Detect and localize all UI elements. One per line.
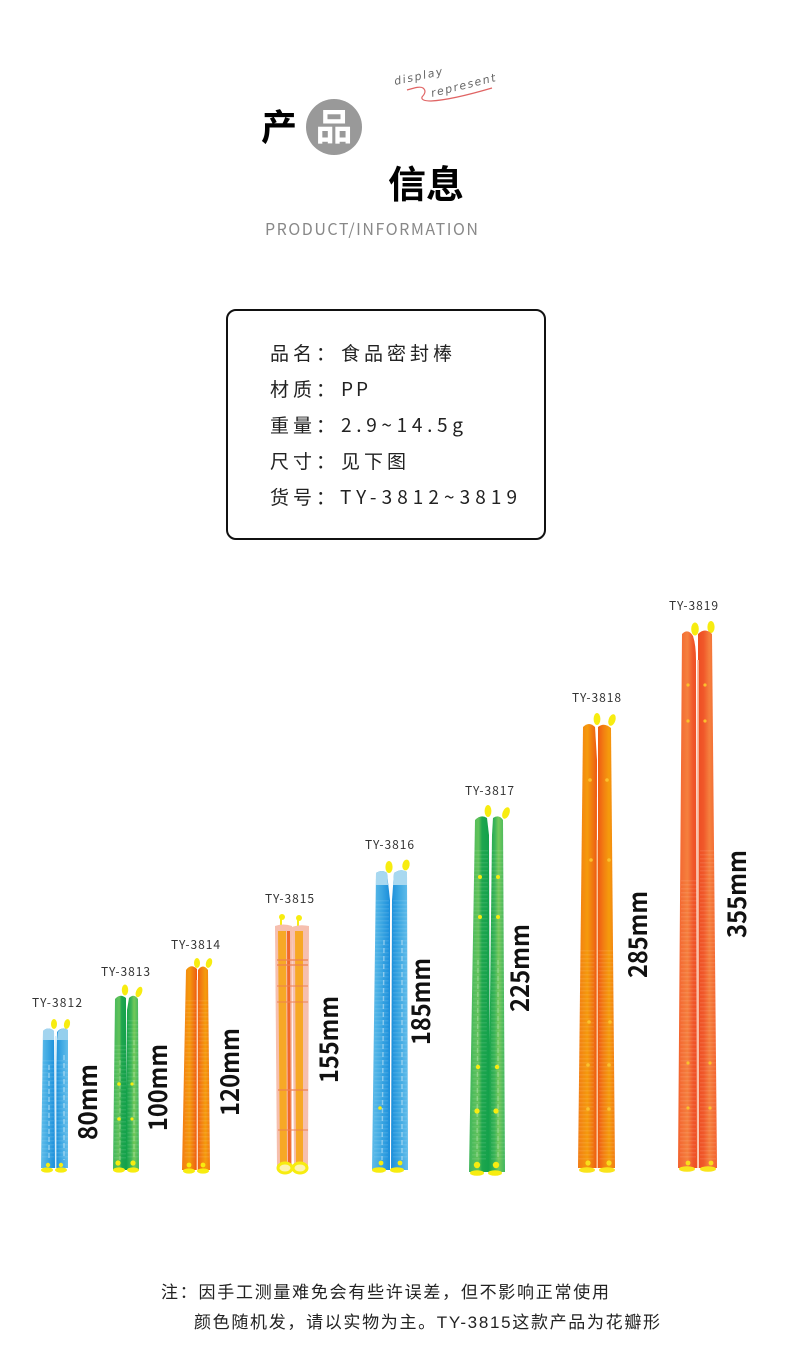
stick TY-3817: TY-3817 [465, 782, 514, 799]
stick TY-3814: TY-3814 [171, 936, 220, 953]
spec row: size: 见下图 [341, 447, 410, 474]
spec row: name: 品名： [270, 339, 339, 366]
title character: chan: 产 [261, 107, 297, 148]
stick TY-3819: TY-3819 [669, 597, 718, 614]
note line 1: 注：因手工测量难免会有些许误差，但不影响正常使用 [161, 1282, 609, 1302]
spec row: weight: 重量： [270, 411, 339, 438]
stick TY-3812 [32, 994, 82, 1173]
spec row: item number: 货号： [270, 483, 339, 510]
size label: 185mm: 185mm [402, 958, 438, 1045]
icon: grey circle with pin: 品 [316, 107, 352, 148]
size label: 355mm: 355mm [718, 850, 754, 938]
decorative handwriting: display represent: display [393, 65, 444, 88]
size label: 225mm: 225mm [501, 924, 537, 1012]
title characters: information: 信息 [388, 165, 464, 207]
icon: grey circle with pin [306, 99, 362, 155]
stick TY-3819 [669, 597, 718, 1172]
size label: 285mm: 285mm [619, 891, 655, 978]
spec row: name: 食品密封棒 [341, 339, 456, 366]
chart: sealing sticks by size [32, 597, 754, 1176]
stick TY-3817 [465, 782, 514, 1176]
spec row: material: 材质： [270, 375, 339, 402]
spec row: size [270, 447, 410, 474]
size label: 155mm: 155mm [310, 996, 346, 1083]
spec row: material: PP [341, 375, 372, 402]
size label: 100mm: 100mm [139, 1044, 175, 1131]
stick TY-3816: TY-3816 [365, 836, 414, 853]
spec row: material [270, 375, 372, 402]
stick TY-3815 [265, 890, 314, 1173]
footnote [161, 1282, 660, 1332]
spec row: weight [270, 411, 467, 438]
decorative handwriting: display represent [393, 65, 497, 101]
stick TY-3813: TY-3813 [101, 963, 150, 980]
size label: 80mm: 80mm [69, 1064, 105, 1140]
spec row: size: 尺寸： [270, 447, 339, 474]
stick TY-3815: TY-3815 [265, 890, 314, 907]
decorative handwriting: display represent: represent [430, 71, 497, 100]
stick TY-3814 [171, 936, 220, 1174]
stick TY-3813 [101, 963, 150, 1173]
stick TY-3816 [365, 836, 414, 1173]
spec row: item number: TY-3812~3819 [340, 483, 521, 510]
note line 2: 颜色随机发，请以实物为主。TY-3815这款产品为花瓣形 [194, 1313, 660, 1332]
size label: 120mm: 120mm [211, 1028, 247, 1116]
spec row: weight: 2.9~14.5g [341, 411, 467, 438]
header: product information title [261, 65, 497, 240]
english subtitle: PRODUCT/INFORMATION [265, 216, 478, 240]
spec row: name [270, 339, 456, 366]
panel: product specifications [227, 310, 545, 539]
stick TY-3818: TY-3818 [572, 689, 621, 706]
stick TY-3812: TY-3812 [32, 994, 82, 1011]
stick TY-3818 [572, 689, 621, 1173]
